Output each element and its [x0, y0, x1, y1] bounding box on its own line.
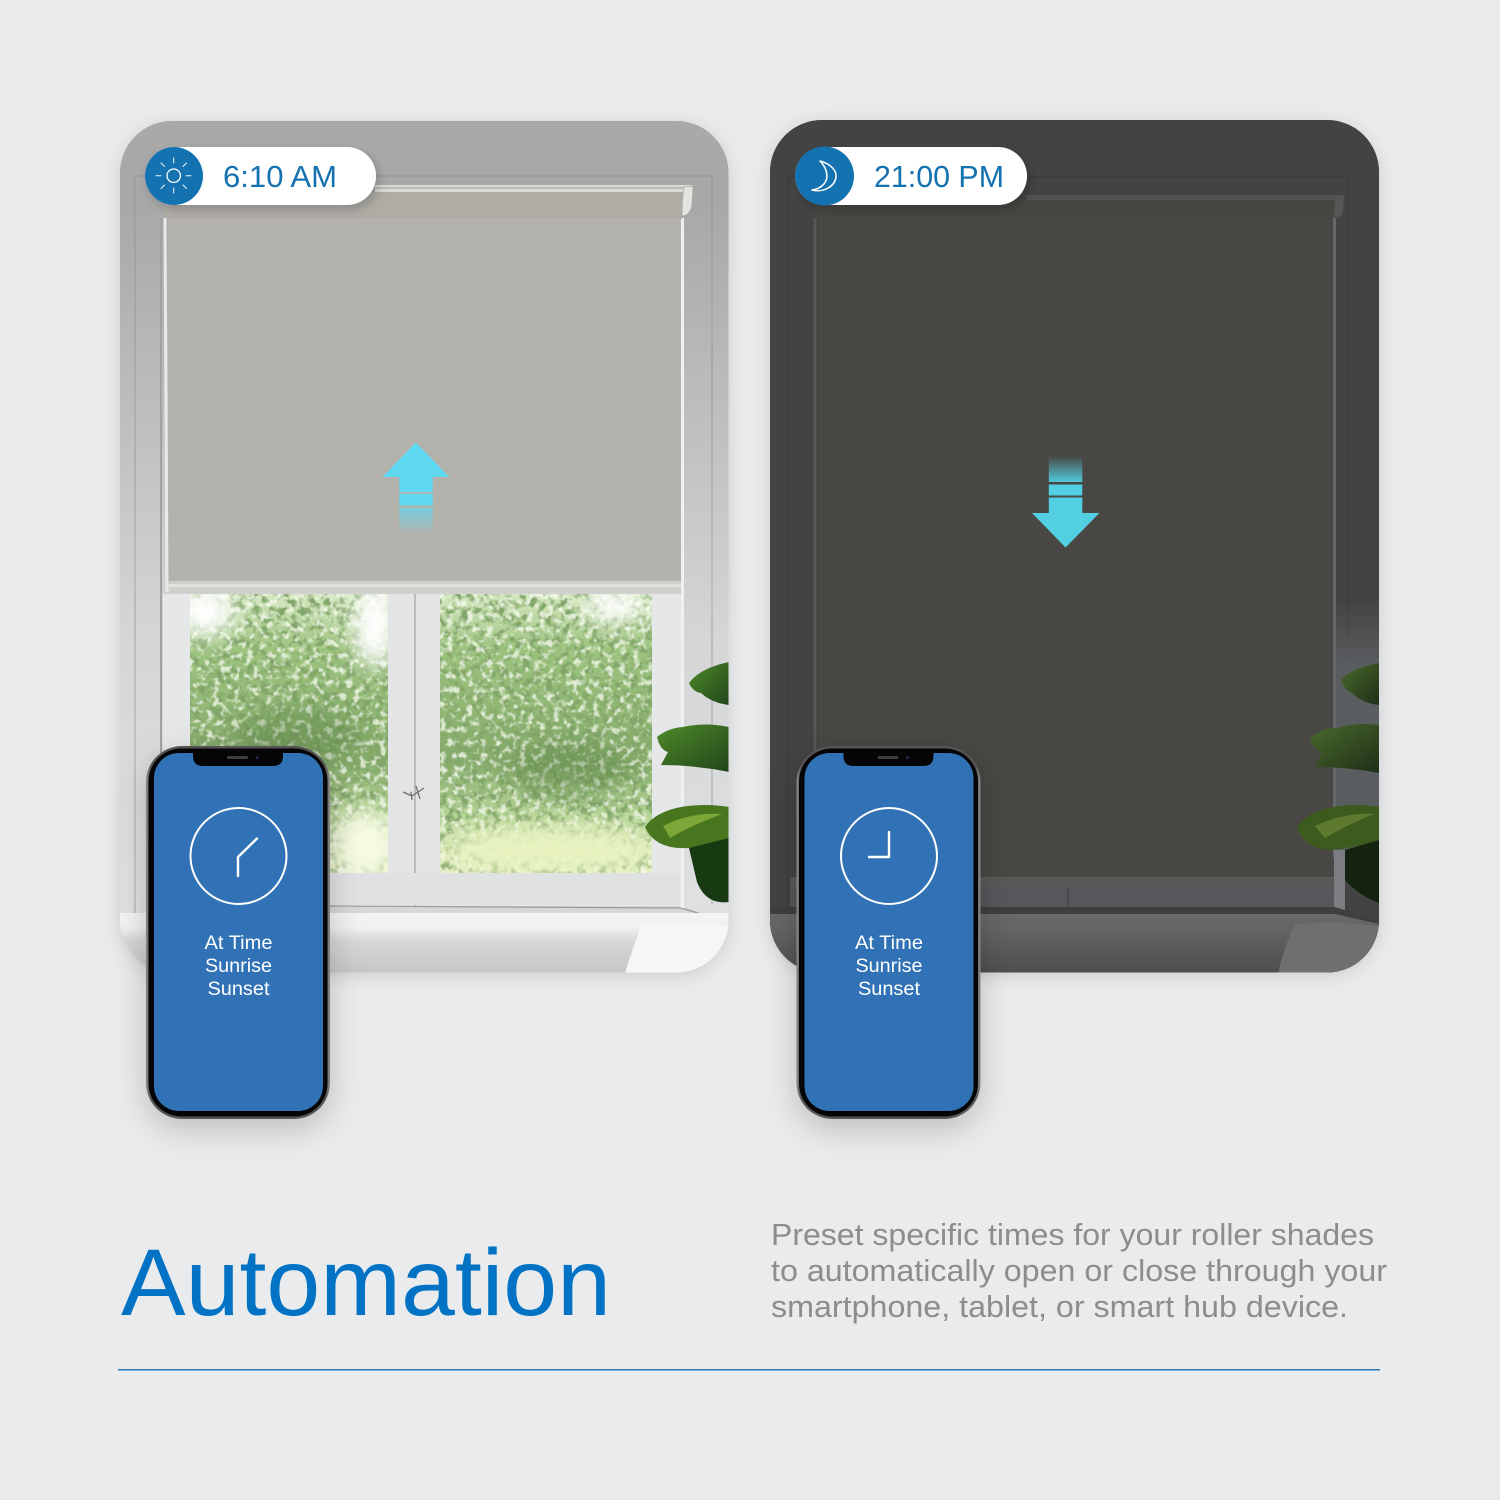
headrail line [375, 188, 684, 189]
cushion [625, 928, 728, 972]
divider [118, 1369, 1380, 1370]
phone bezel [148, 748, 328, 1116]
left rail [814, 218, 816, 752]
icon: sun [145, 147, 203, 205]
roller [165, 192, 682, 219]
phone: evening automation [796, 746, 980, 1119]
description: Preset specific times for your roller shades [771, 1217, 1374, 1252]
window sill [330, 906, 702, 913]
phone notch [844, 752, 934, 766]
arrow: shade moving up [382, 442, 450, 535]
left inner frame line [160, 218, 162, 754]
headrail [375, 185, 692, 192]
right column [1334, 850, 1345, 910]
panel shadows [120, 120, 1379, 972]
right wall strip [1336, 615, 1379, 850]
roller [815, 200, 1342, 219]
pill background [145, 147, 376, 205]
shade weave [818, 216, 1335, 878]
lower casing [790, 889, 1335, 908]
window mullion [388, 594, 440, 906]
phone speaker [227, 756, 248, 759]
casing divider [1068, 889, 1069, 907]
icon: clock [841, 808, 937, 904]
shade fabric [1334, 216, 1335, 218]
bench [770, 914, 1379, 973]
roller end cap [682, 186, 693, 216]
left shade rail [165, 218, 167, 592]
automation options: Sunset [208, 978, 270, 1000]
cushion [1278, 922, 1380, 973]
automation options: At Time [204, 932, 272, 954]
shade fabric [168, 216, 681, 582]
phone: morning automation [146, 746, 330, 1119]
automation options: At Time [855, 932, 923, 954]
time label: 6:10 AM [223, 159, 337, 194]
automation options: Sunset [858, 978, 921, 1000]
icon: moon [795, 146, 854, 206]
pill background [795, 147, 1027, 205]
right rail [1333, 218, 1336, 858]
phone body [796, 746, 980, 1119]
description: to automatically open or close through your [771, 1253, 1387, 1288]
phone body [146, 746, 330, 1119]
panel: morning room with shade raised [120, 121, 729, 973]
phone screen [804, 753, 974, 1111]
window frame outline [788, 960, 789, 961]
phone speaker [878, 756, 898, 759]
lower casing top [790, 877, 1335, 889]
bench [120, 913, 729, 973]
phone camera [256, 756, 258, 759]
lower casing [414, 873, 416, 905]
time pill: 21:00 PM [795, 146, 1027, 206]
automation options [855, 932, 923, 1000]
arrow: shade moving down [1032, 456, 1100, 548]
headrail [1026, 195, 1344, 200]
window latch [403, 786, 424, 800]
panel: evening room with shade lowered [770, 120, 1380, 973]
shade bottom bar [169, 581, 681, 582]
shade weave [168, 192, 681, 582]
time label: 21:00 PM [874, 159, 1004, 194]
infographic canvas [114, 118, 1386, 1370]
plant leaves [1297, 663, 1379, 903]
time pill: 6:10 AM [145, 147, 376, 205]
plant leaves [645, 662, 729, 902]
phone bezel [799, 748, 978, 1116]
phone screen [154, 753, 323, 1111]
window glass with foliage [190, 594, 652, 873]
phone camera [906, 756, 909, 759]
window casing [163, 594, 681, 872]
roller end cap [1334, 200, 1344, 218]
bottom bar highlight [169, 584, 681, 587]
title: Automation [121, 1230, 611, 1336]
phone notch [193, 752, 283, 766]
automation options: Sunrise [856, 955, 922, 977]
automation options: Sunrise [205, 955, 272, 977]
description: smartphone, tablet, or smart hub device. [771, 1289, 1348, 1324]
description [771, 1217, 1387, 1324]
automation options [204, 932, 272, 1000]
window frame outline [135, 176, 712, 973]
right casing strip [681, 218, 684, 908]
mullion split [414, 594, 416, 906]
icon: clock [190, 808, 286, 904]
sill [770, 907, 1379, 930]
sill edge [330, 905, 700, 913]
